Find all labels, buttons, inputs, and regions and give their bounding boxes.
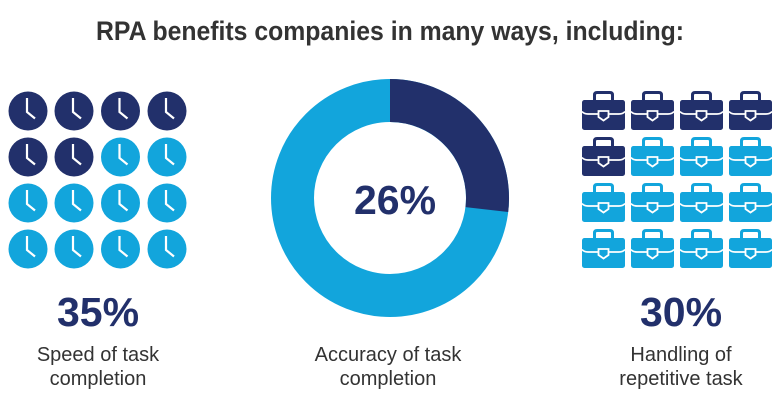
label: speed: Speed of task xyxy=(37,344,159,366)
panel: accuracy of task completion xyxy=(292,79,509,390)
stat: 26%: 26% xyxy=(354,177,436,223)
label: handling: Handling of xyxy=(630,344,732,366)
stat: 30%: 30% xyxy=(640,289,722,335)
panel: handling of repetitive task xyxy=(582,92,772,390)
label: handling: repetitive task xyxy=(619,368,744,390)
stat: 35%: 35% xyxy=(57,289,139,335)
label: accuracy: Accuracy of task xyxy=(315,344,461,366)
clock icon grid xyxy=(8,92,186,268)
donut chart xyxy=(292,79,509,295)
title: RPA benefits companies in many ways, including: xyxy=(96,16,684,46)
panel: speed of task completion xyxy=(8,92,186,390)
label: speed: completion xyxy=(50,368,146,390)
briefcase icon grid xyxy=(582,92,772,268)
label: accuracy: completion xyxy=(340,368,436,390)
